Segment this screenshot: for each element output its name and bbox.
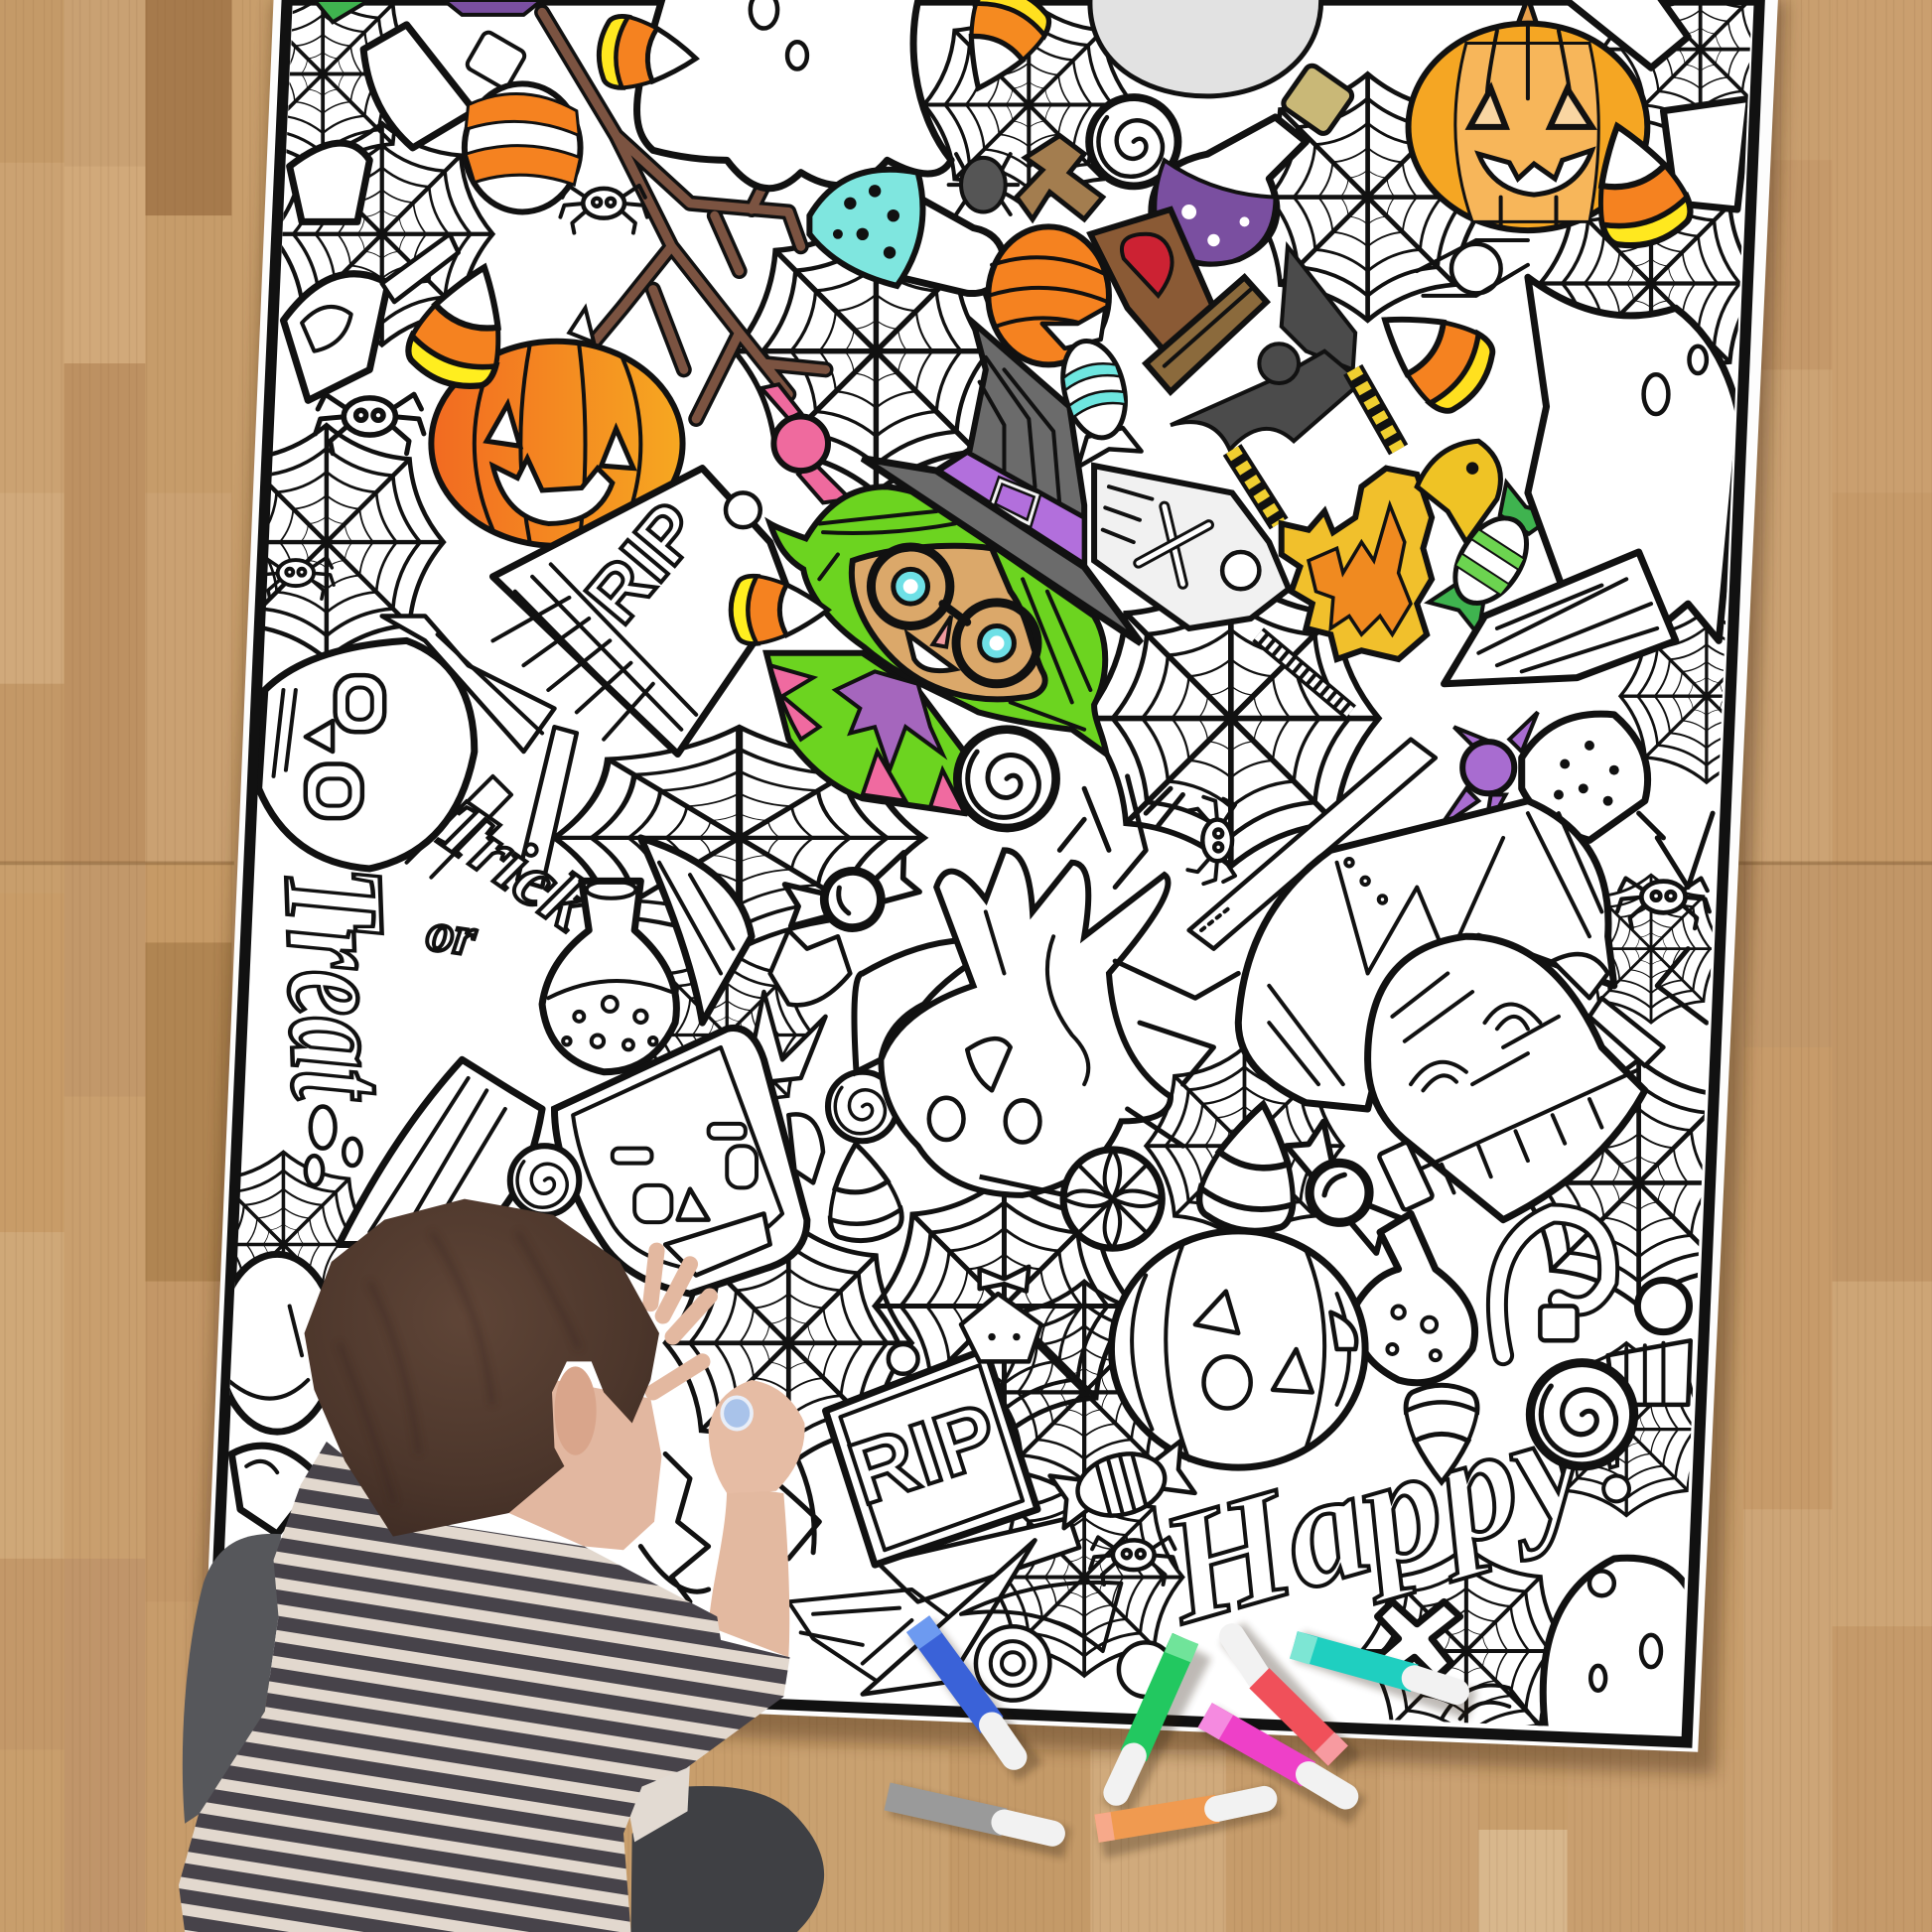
witch candy corn: [731, 576, 828, 643]
broom lower left: [339, 1059, 542, 1244]
boy colouring: [173, 1199, 824, 1932]
lollipop spiral: [957, 730, 1056, 828]
teal striped candy: [1042, 308, 1142, 467]
pumpkin bottom left: [218, 1254, 337, 1534]
marker shadows: [893, 1629, 1472, 1844]
dotted potion right: [1522, 714, 1648, 840]
purple potion flask: [1152, 63, 1355, 263]
markers group: [888, 1624, 1472, 1844]
witch face: [852, 546, 1045, 699]
witch hair: [770, 486, 1106, 755]
bat skull centre: [854, 850, 1171, 1195]
broom head: [1189, 552, 1676, 949]
undershirt: [622, 1762, 690, 1842]
candy corn top right: [1598, 121, 1694, 248]
small dark spider: [949, 154, 1018, 214]
grey bat: [1171, 246, 1361, 450]
writing hand: [709, 1380, 805, 1493]
candy corn white left: [820, 1139, 904, 1245]
glasses and eyes: [871, 547, 1037, 684]
candy corn white centre right: [1195, 1096, 1310, 1238]
candy near centre: [780, 851, 924, 944]
trick or treat lettering: Trick: [422, 781, 608, 947]
pink wrapped candy: [761, 384, 850, 502]
witch hat: [863, 323, 1141, 643]
marker: teal: [1294, 1645, 1456, 1692]
swirl small: [828, 1072, 897, 1141]
witch collar: [766, 653, 973, 813]
teal mushroom and bottle: [809, 170, 1004, 294]
bottom shapes near pen: [788, 1540, 1540, 1727]
art behind the boy's arm: [640, 1442, 819, 1601]
marker: green: [1116, 1639, 1185, 1793]
trick or treat lettering: [254, 781, 608, 1185]
trick or treat lettering: Treat: [254, 865, 420, 1104]
marker: orange: [1097, 1799, 1264, 1829]
cross bottom: [1370, 1601, 1460, 1678]
big skull left: [259, 617, 554, 878]
small bat with bow: [961, 1267, 1041, 1361]
marker: grey: [888, 1796, 1052, 1834]
coffin with crossbones: [1094, 466, 1350, 712]
spider webs: [191, 0, 1799, 1756]
right leg: [630, 1786, 824, 1932]
marker: red: [1232, 1636, 1338, 1756]
building top right: [1559, 0, 1749, 209]
happy lettering: Happy!: [1143, 1354, 1664, 1658]
brown cross and coffin with heart: [1017, 136, 1267, 392]
poster shadow: [198, 0, 1787, 1774]
bat wing fragment: [640, 838, 850, 1084]
candy corn lower right: [1406, 1385, 1477, 1482]
poster sheet: [204, 0, 1778, 1752]
hair: [305, 1199, 659, 1537]
candy corn top: [596, 15, 699, 94]
pinwheel lollipop: [980, 1150, 1162, 1248]
purple wrapped candy: [1440, 712, 1538, 832]
heart coffin left: [283, 234, 459, 400]
ear: [554, 1366, 597, 1455]
swirl candy: [1089, 97, 1177, 186]
left knee: [183, 1534, 281, 1824]
frankenstein head left: [554, 1028, 823, 1294]
top right pumpkin: [1409, 0, 1647, 230]
trick or treat lettering: or: [423, 900, 481, 967]
ghost lower right: [1543, 1558, 1694, 1737]
marker: magenta: [1205, 1716, 1345, 1796]
branching brown tree: [542, 12, 826, 419]
small print: ARTISTIC CHAOS INK TM: [1361, 1726, 1436, 1736]
right ghost: [1417, 240, 1739, 640]
flask lower left: [542, 881, 676, 1072]
ghost top centre: [637, 0, 951, 189]
orange striped candy: [465, 83, 581, 211]
RIP coffin slab: RIP: [570, 486, 717, 639]
candy cane swirl: [1497, 1213, 1608, 1355]
candy corn top centre: [969, 0, 1052, 92]
candy white right: [1272, 1118, 1410, 1266]
left jack-o-lantern: [431, 308, 683, 546]
held marker cap: [722, 1397, 752, 1430]
neck and face: [509, 1380, 661, 1550]
RIP coffin slab: [492, 469, 788, 755]
spiral lollipop lower right: [1530, 1363, 1634, 1466]
striped candy lower: [1049, 1439, 1195, 1531]
striped shirt: [173, 1436, 801, 1932]
grey blob top: [1090, 0, 1321, 96]
orange pumpkin centre: [988, 226, 1109, 364]
green striped candy: [1429, 483, 1556, 634]
dead branches: [1059, 776, 1713, 1146]
RIP tombstone: RIP: [838, 1384, 1009, 1524]
left candy corn: [401, 252, 526, 397]
outlined jack-o-lantern lower: [1111, 1231, 1365, 1467]
white spiders: [258, 186, 1710, 1585]
RIP tombstone: [826, 1344, 1079, 1601]
yellow bird: [1417, 441, 1500, 542]
ball and box right: [1608, 1280, 1691, 1405]
raised fingers: [650, 1251, 710, 1392]
yellow striped legs: [1232, 369, 1399, 523]
potion flask lower right: [1354, 1142, 1475, 1383]
frankenstein large right: [1238, 801, 1614, 1109]
flame tail creature: [1282, 469, 1432, 659]
top left bits: [290, 0, 542, 221]
marker: blue: [918, 1624, 1014, 1757]
spiral left lower: [510, 1146, 579, 1215]
pencil left: [517, 727, 577, 888]
candy corn right: [1361, 285, 1504, 421]
stitched tombstone: [1368, 936, 1663, 1220]
forearm: [709, 1484, 789, 1657]
poster artwork: [191, 0, 1799, 1756]
